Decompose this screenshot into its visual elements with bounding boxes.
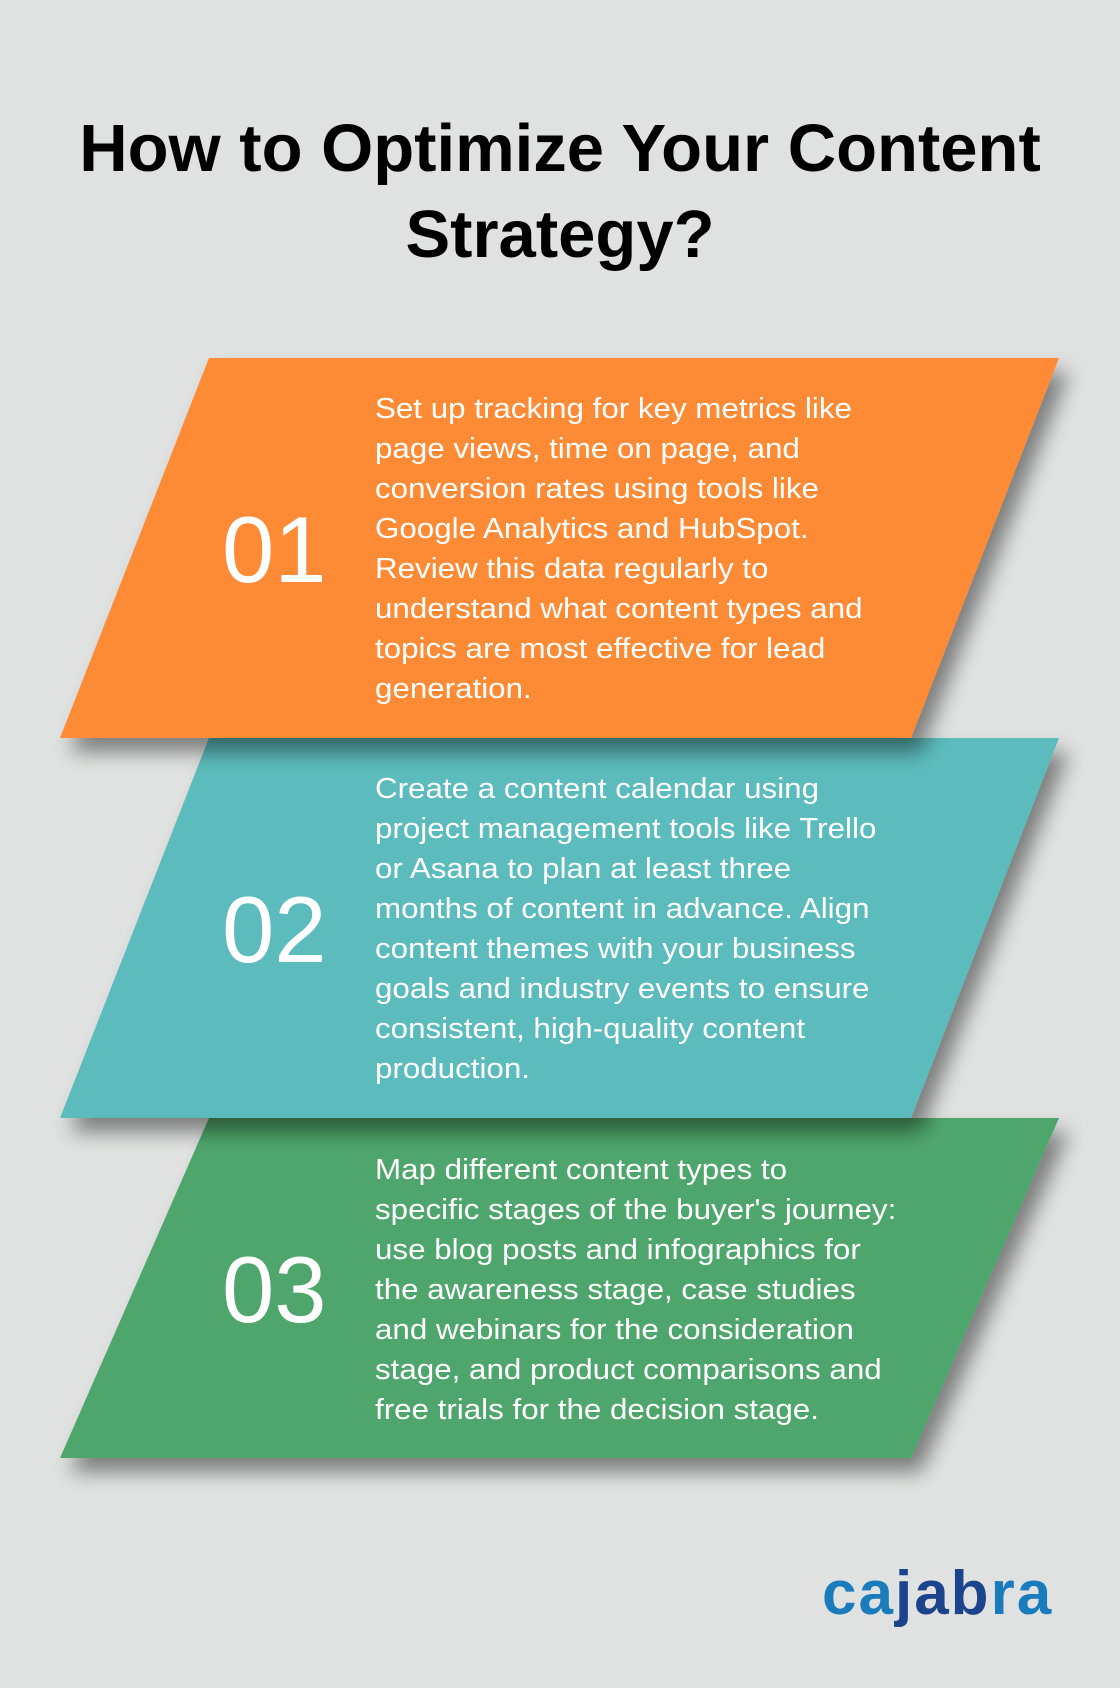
panel: green <box>60 1118 1059 1458</box>
text 01: Google Analytics and HubSpot. <box>375 513 809 545</box>
panel: teal <box>60 738 1059 1118</box>
number 02: 02 <box>222 877 327 982</box>
text 02: content themes with your business <box>375 933 855 965</box>
logo: cajabra <box>822 1559 1053 1628</box>
text 02 <box>375 773 876 1085</box>
title: Strategy? <box>405 197 715 272</box>
text 03: the awareness stage, case studies <box>375 1274 856 1306</box>
text 02: production. <box>375 1053 530 1085</box>
text 03: use blog posts and infographics for <box>375 1234 861 1266</box>
panel: orange <box>60 358 1059 738</box>
text 03: free trials for the decision stage. <box>375 1394 819 1426</box>
title <box>79 111 1041 272</box>
text 02: consistent, high-quality content <box>375 1013 805 1045</box>
text 01: page views, time on page, and <box>375 433 800 465</box>
text 03 <box>375 1154 896 1426</box>
text 03: stage, and product comparisons and <box>375 1354 882 1386</box>
text 01: understand what content types and <box>375 593 863 625</box>
text 01: topics are most effective for lead <box>375 633 825 665</box>
number 01: 01 <box>222 497 327 602</box>
text 01: conversion rates using tools like <box>375 473 819 505</box>
text 01: Review this data regularly to <box>375 553 768 585</box>
text 01: Set up tracking for key metrics like <box>375 393 852 425</box>
title: How to Optimize Your Content <box>79 111 1041 186</box>
text 03: specific stages of the buyer's journey: <box>375 1194 896 1226</box>
text 01 <box>375 393 863 705</box>
text 03: Map different content types to <box>375 1154 787 1186</box>
number 03: 03 <box>222 1237 327 1342</box>
text 03: and webinars for the consideration <box>375 1314 854 1346</box>
text 02: Create a content calendar using <box>375 773 819 805</box>
text 02: or Asana to plan at least three <box>375 853 791 885</box>
text 02: months of content in advance. Align <box>375 893 869 925</box>
text 02: goals and industry events to ensure <box>375 973 869 1005</box>
text 01: generation. <box>375 673 532 705</box>
text 02: project management tools like Trello <box>375 813 876 845</box>
